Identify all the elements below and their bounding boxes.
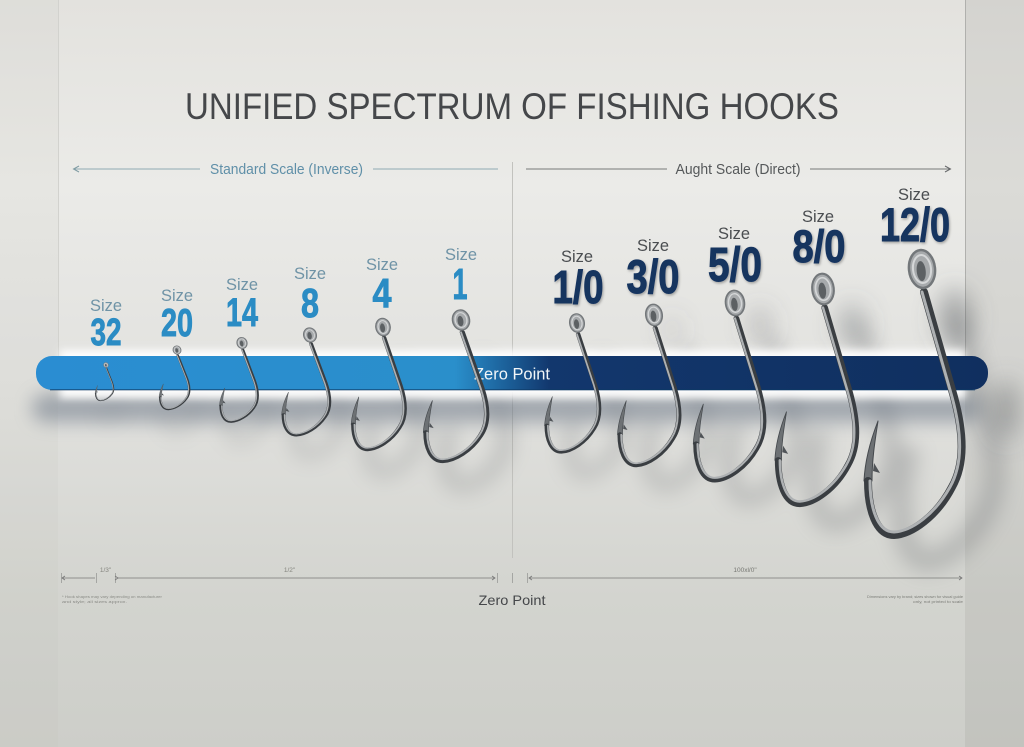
hook: size 14 xyxy=(219,337,257,422)
size label: 12/0: 12/0 xyxy=(880,198,950,251)
size label: 1: Size xyxy=(445,245,477,264)
footnote: left: and style; all sizes approx. xyxy=(62,600,127,604)
hook: size 3/0 xyxy=(617,304,679,465)
size label: 14 xyxy=(226,275,259,335)
size label: 8/0 xyxy=(792,207,846,272)
size label: 1: 1 xyxy=(452,260,468,309)
upper hook shadows and right-end shadow xyxy=(663,288,1020,440)
scale guide lines xyxy=(58,0,966,558)
size label: 8: 8 xyxy=(301,280,319,326)
header: aught scale (direct) xyxy=(526,162,950,178)
footnote: left: * Hook shapes may vary depending on manufacturer xyxy=(62,595,163,599)
size label: 12/0 xyxy=(880,185,950,251)
hook: size 1/0 xyxy=(545,313,599,452)
size label: 14: 14 xyxy=(226,291,259,335)
size label: 32: Size xyxy=(90,296,122,315)
hook: size 5/0 xyxy=(693,290,764,480)
hook: size 20 xyxy=(159,345,189,409)
dimension label: left: 1/3" xyxy=(100,567,112,574)
size label: 1/0 xyxy=(552,247,604,313)
bar label: zero point: Zero Point xyxy=(474,366,550,384)
size label: 3/0: 3/0 xyxy=(626,250,680,303)
size label: 1/0: 1/0 xyxy=(552,261,604,313)
size label: 1/0: Size xyxy=(561,247,593,266)
title: UNIFIED SPECTRUM OF FISHING HOOKS xyxy=(185,86,839,127)
hook: size 8 xyxy=(282,327,329,435)
hook: size 32 xyxy=(95,362,114,401)
zero point caption: Zero Point xyxy=(478,592,546,608)
dimension label: right: 100xl/0" xyxy=(733,567,757,574)
size label: 20: 20 xyxy=(161,302,193,345)
size label: 8 xyxy=(294,264,326,326)
hook: size 1 xyxy=(423,309,487,461)
size label: 4: 4 xyxy=(372,270,392,316)
size label: 1 xyxy=(445,245,477,309)
hook: size 12/0 xyxy=(864,249,962,535)
size label: 20 xyxy=(161,286,193,345)
size label: 8/0: Size xyxy=(802,207,834,226)
size label: 32: 32 xyxy=(90,312,122,354)
size label: 4 xyxy=(366,255,398,316)
footnote: right: only, not printed to scale xyxy=(913,600,963,604)
header: standard scale (inverse) xyxy=(74,162,498,178)
size label: 5/0: 5/0 xyxy=(708,239,762,292)
bar shadow and glow xyxy=(32,350,982,422)
footnote: right: Dimensions vary by brand; sizes shown for visual guide xyxy=(867,595,963,599)
size label: 14: Size xyxy=(226,275,258,294)
size label: 8: Size xyxy=(294,264,326,283)
header: aught scale (direct): Aught Scale (Direct) xyxy=(676,162,800,178)
size label: 5/0 xyxy=(708,224,762,292)
size label: 8/0: 8/0 xyxy=(792,221,846,272)
hook shadows xyxy=(102,318,995,561)
size label: 3/0: Size xyxy=(637,236,669,255)
size label: 4: Size xyxy=(366,255,398,274)
header: standard scale (inverse): Standard Scale (Inverse) xyxy=(210,162,363,178)
size label: 3/0 xyxy=(626,236,680,303)
size label: 5/0: Size xyxy=(718,224,750,243)
footnote: left xyxy=(62,595,163,604)
dimension rule xyxy=(62,567,962,583)
hook: size 8/0 xyxy=(775,273,856,504)
size label: 12/0: Size xyxy=(898,185,930,204)
spectrum bar xyxy=(36,356,988,390)
hook: size 4 xyxy=(351,318,405,449)
size label: 20: Size xyxy=(161,286,193,305)
size label: 32 xyxy=(90,296,122,354)
footnote: right xyxy=(867,595,963,604)
dimension label: middle: 1/2" xyxy=(284,567,296,574)
